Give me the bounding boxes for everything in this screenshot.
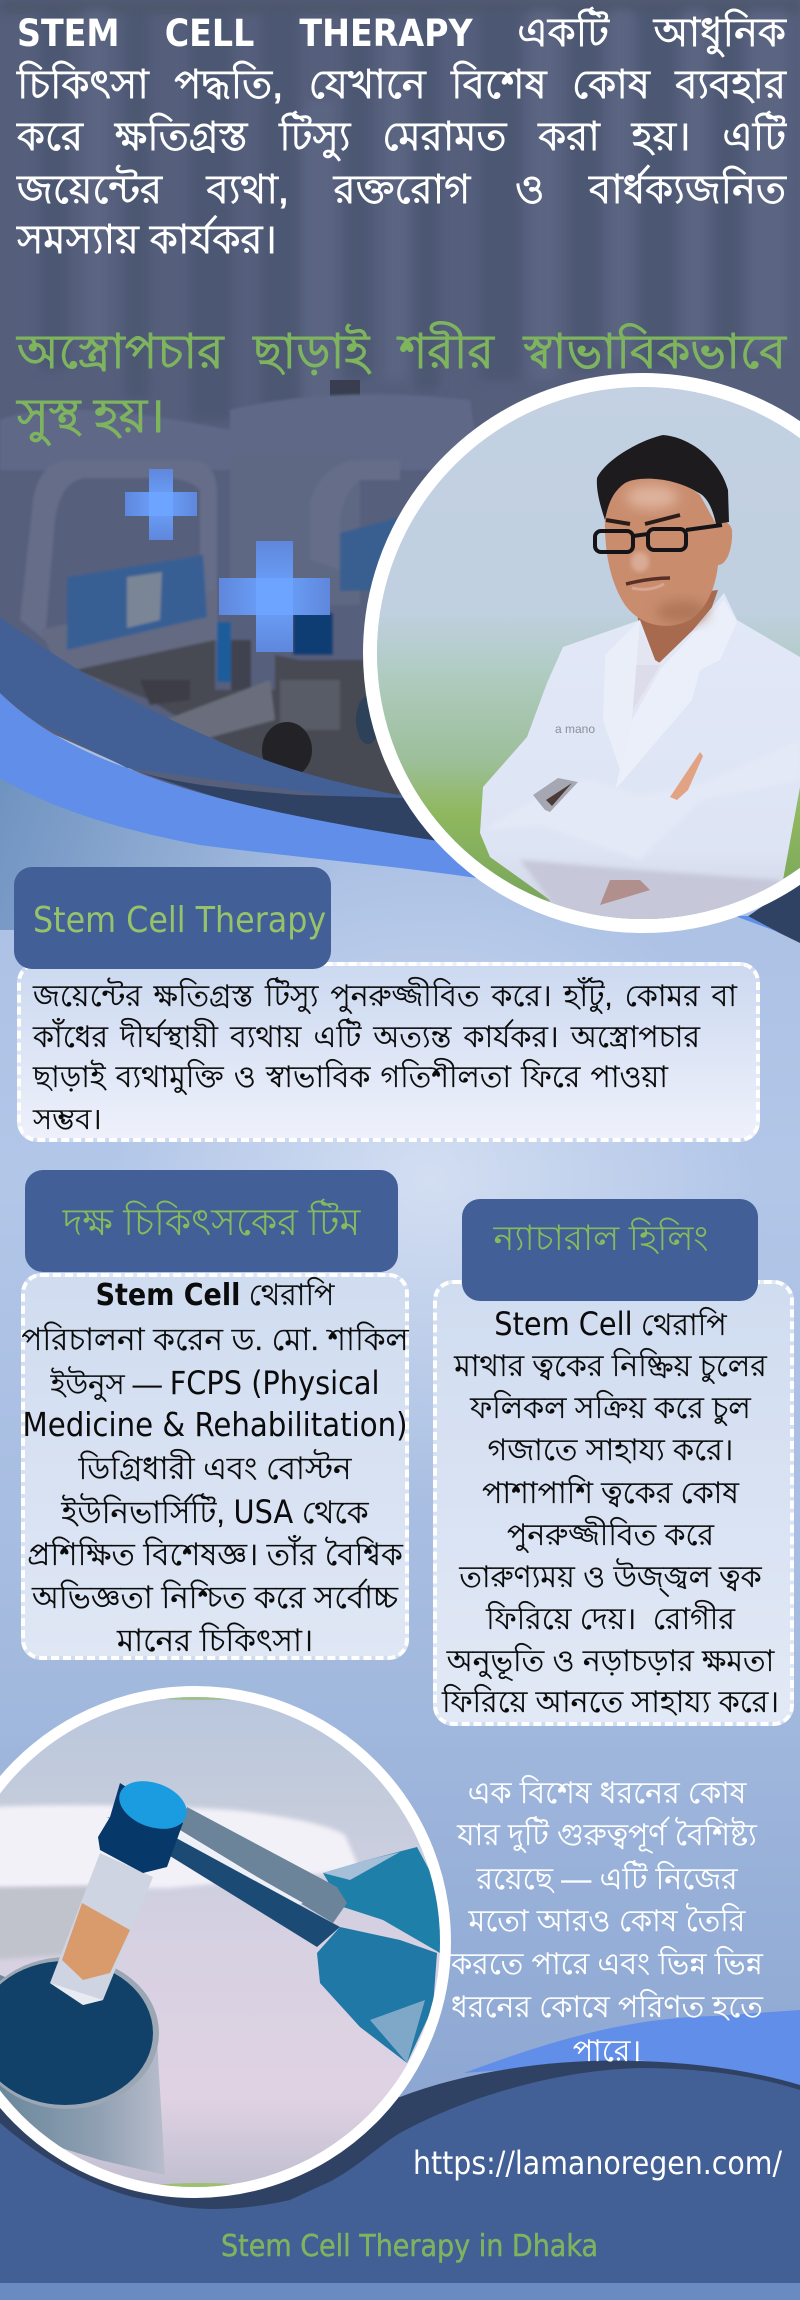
text block: what is a stem cell: করতে পারে এবং ভিন্ন ভিন্ন [451,1948,763,1981]
beds [0,394,480,810]
text block: what is a stem cell: এক বিশেষ ধরনের কোষ [468,1777,746,1810]
card: natural healing text: পুনরুজ্জীবিত করে [507,1519,714,1552]
website url: https://lamanoregen.com/ [413,2146,782,2182]
coat logo: a mano [555,722,595,736]
heading box: natural healing: ন্যাচারাল হিলিং [494,1219,708,1258]
card: natural healing text: Stem Cell থেরাপি [494,1305,727,1343]
card: natural healing text: গজাতে সাহায্য করে। [488,1434,733,1467]
watch [533,778,578,812]
lab photo: test tube held by forceps [0,1690,460,2200]
heading box: stem cell therapy [14,867,331,969]
card: natural healing text: মাথার ত্বকের নিষ্ক্রিয় চুলের [454,1350,767,1383]
card: natural healing text: পাশাপাশি ত্বকের কোষ [482,1477,739,1510]
card: skilled doctors text: অভিজ্ঞতা নিশ্চিত করে সর্বোচ্চ [32,1580,398,1615]
bed wheels [262,722,312,772]
intro paragraph: সমস্যায় কার্যকর। [17,218,277,262]
bed headboard [20,470,218,640]
card: skilled doctors text: ইউনুস — FCPS (Physical [50,1364,380,1402]
card: natural healing text: তারুণ্যময় ও উজ্জ্বল ত্বক [459,1561,762,1594]
card: stem cell therapy text: জয়েন্টের ক্ষতিগ্রস্ত টিস্যু পুনরুজ্জীবিত করে। হাঁটু, কোমর বা [33,980,737,1013]
hand [670,752,703,800]
neck [636,590,718,665]
card: stem cell therapy text: সম্ভব। [33,1104,102,1136]
card: skilled doctors text: ইউনিভার্সিটি, USA থেকে [61,1493,369,1531]
blue bed panels [67,555,207,650]
lapels [603,620,640,770]
card: natural healing text: ফলিকল সক্রিয় করে চুল [470,1392,751,1425]
doctor portrait [370,380,800,960]
card: stem cell therapy text [17,962,760,1142]
bottom wave [0,2010,800,2300]
text block: what is a stem cell: মতো আরও কোষ তৈরি [469,1905,745,1938]
shirt [654,659,660,665]
card: skilled doctors text: মানের চিকিৎসা। [117,1623,313,1658]
card: stem cell therapy text: ছাড়াই ব্যথামুক্তি ও স্বাভাবিক গতিশীলতা ফিরে পাওয়া [33,1061,668,1094]
green slivers [164,1697,230,1700]
heading box: skilled doctors team: দক্ষ চিকিৎসকের টিম [63,1201,360,1243]
face [605,477,732,626]
top wave bands [0,617,800,943]
intro paragraph: জয়েন্টের ব্যথা, রক্তরোগ ও বার্ধক্যজনিত [17,168,786,212]
eyebrows [606,515,680,524]
hair [597,435,729,524]
card: natural healing text: ফিরিয়ে দেয়। রোগীর [486,1603,735,1636]
card: skilled doctors text [21,1273,409,1660]
heading box: skilled doctors team [25,1170,398,1272]
floor [75,640,400,810]
card: stem cell therapy text: কাঁধের দীর্ঘস্থায়ী ব্যথায় এটি অত্যন্ত কার্যকর। অস্ত্রোপচার [33,1021,700,1054]
background photo: hospital ward [0,0,800,810]
icon: small cross [125,469,197,540]
coat [480,593,800,919]
card: skilled doctors text: ডিগ্রিধারী এবং বোস্টন [79,1451,351,1486]
forceps [180,1807,347,1923]
curtains [0,0,800,420]
green tagline [16,321,788,446]
card: natural healing text [433,1280,794,1726]
intro paragraph: করে ক্ষতিগ্রস্ত টিস্যু মেরামত করা হয়। এটি [17,115,786,159]
intro paragraph [16,6,787,262]
card: skilled doctors text: প্রশিক্ষিত বিশেষজ্ঞ। তাঁর বৈশ্বিক [27,1537,403,1572]
page background [0,700,800,2300]
card: skilled doctors text: পরিচালনা করেন ড. মো. শাকিল [21,1322,409,1357]
intro paragraph: STEM CELL THERAPY একটি আধুনিক [17,11,786,55]
text block: what is a stem cell [450,1774,764,2068]
bright surface [0,1805,360,1888]
green tagline: সুস্থ হয়। [17,390,164,443]
heading box: stem cell therapy: Stem Cell Therapy [33,900,326,941]
gloved hand lower [317,1927,437,2063]
card: skilled doctors text: Stem Cell থেরাপি [96,1278,334,1313]
mouth [626,578,670,584]
heading box: natural healing [462,1199,758,1301]
gloved hand upper [323,1847,440,1953]
card: natural healing text: ফিরিয়ে আনতে সাহায্য করে। [442,1686,779,1719]
tube cap [98,1783,183,1873]
glasses [595,525,722,552]
footer title: Stem Cell Therapy in Dhaka [221,2229,598,2264]
intro paragraph: চিকিৎসা পদ্ধতি, যেখানে বিশেষ কোষ ব্যবহার [17,63,786,107]
sleeve shading [638,855,640,856]
cryo container [0,1974,165,2175]
icon: large cross [219,541,330,652]
card: natural healing text: অনুভূতি ও নড়াচড়ার ক্ষমতা [447,1645,774,1678]
text block: what is a stem cell: ধরনের কোষে পরিণত হতে [451,1991,763,2024]
text block: what is a stem cell: পারে। [573,2035,641,2068]
green tagline: অস্ত্রোপচার ছাড়াই শরীর স্বাভাবিকভাবে [17,326,786,379]
text block: what is a stem cell: রয়েছে — এটি নিজের [476,1863,738,1896]
text block: what is a stem cell: যার দুটি গুরুত্বপূর্ণ বৈশিষ্ট্য [457,1819,757,1852]
card: skilled doctors text: Medicine & Rehabilitation) [22,1406,408,1444]
tube [50,1853,153,2005]
